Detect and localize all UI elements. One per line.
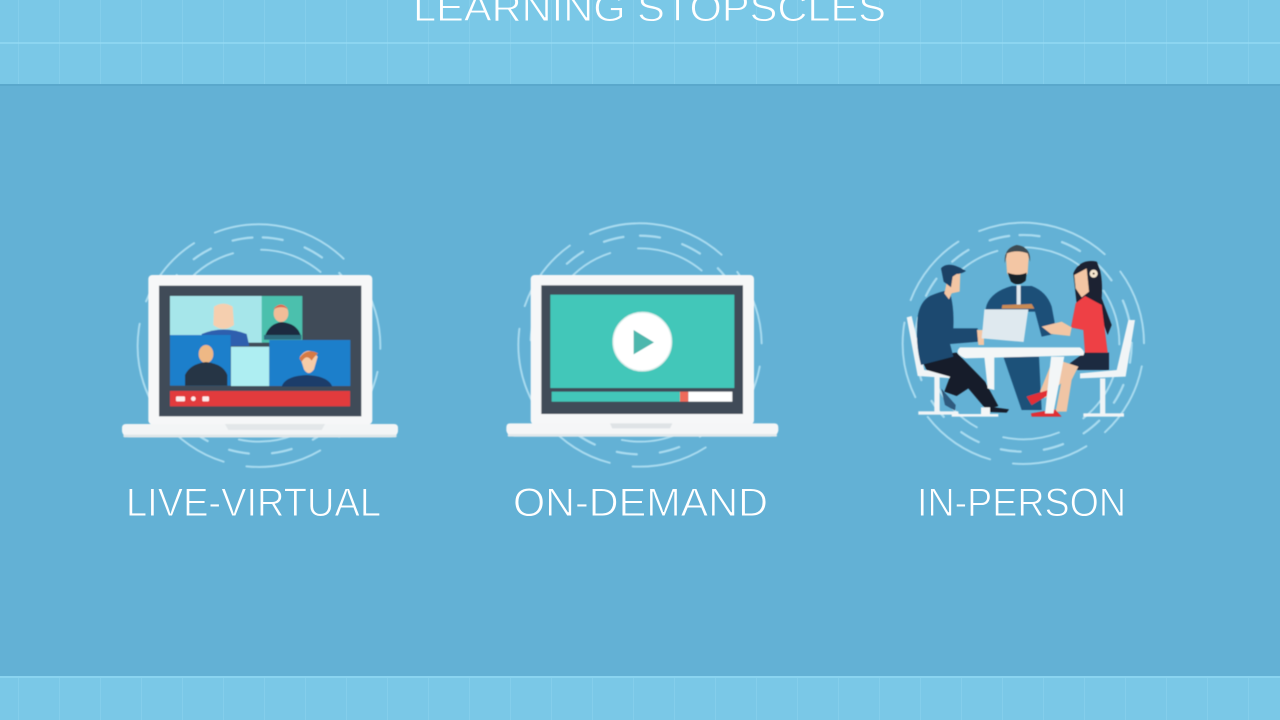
laptop screen	[159, 286, 361, 416]
participant tile: center blank	[231, 347, 269, 386]
label: in-person: IN-PERSON	[917, 481, 1126, 525]
label: live-virtual: LIVE-VIRTUAL	[126, 481, 381, 525]
icon: in-person meeting	[891, 211, 1156, 476]
concentric dashed rings	[891, 211, 1156, 476]
icon: on-demand laptop	[506, 211, 778, 479]
participant tile: large top	[170, 296, 262, 346]
participant tile: lower right	[269, 340, 350, 387]
woman	[1027, 261, 1112, 417]
panel: footer band	[0, 676, 1280, 720]
laptop base	[506, 423, 778, 437]
right chair	[1080, 320, 1135, 417]
laptop lid	[531, 275, 754, 424]
participant tile: small green	[262, 296, 302, 343]
progress bar	[552, 392, 732, 402]
left man	[917, 265, 1009, 414]
label: on-demand: ON-DEMAND	[513, 481, 768, 525]
laptop screen	[541, 285, 743, 414]
panel: header band	[0, 0, 1280, 86]
middle man	[985, 245, 1057, 410]
video area	[550, 295, 734, 388]
laptop base	[122, 424, 398, 437]
red control bar	[170, 391, 350, 406]
laptop lid	[148, 275, 372, 424]
concentric dashed rings	[506, 211, 774, 479]
meeting laptop	[982, 309, 1028, 342]
play button	[613, 312, 672, 371]
participant tile: lower left	[170, 335, 231, 386]
concentric dashed rings	[122, 209, 396, 483]
icon: live-virtual laptop	[122, 209, 398, 483]
table	[952, 347, 1084, 417]
left chair	[907, 316, 958, 415]
